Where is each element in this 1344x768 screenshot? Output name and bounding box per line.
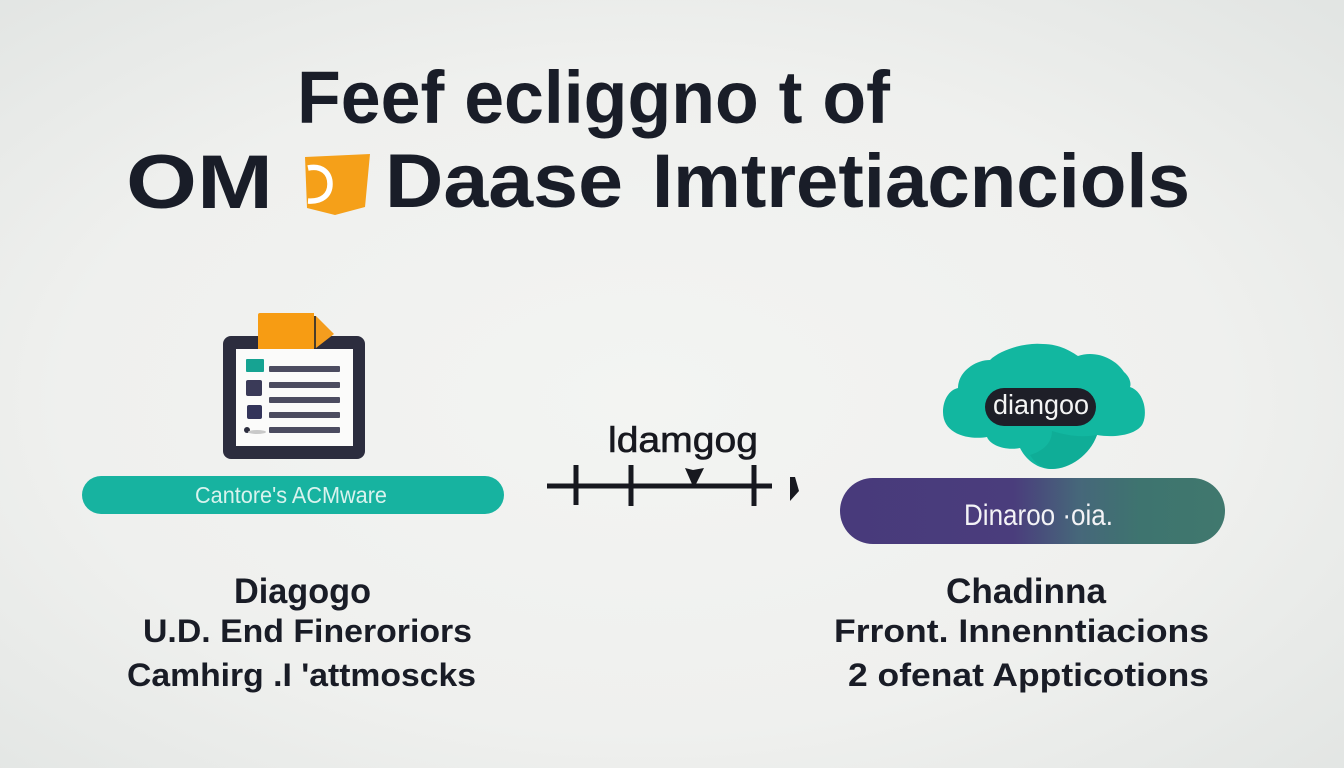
left text block: Diagogo [234, 572, 371, 611]
timeline label: ldamgog [608, 419, 758, 460]
title word: OM: OM [126, 140, 273, 225]
left text block [127, 572, 476, 693]
timeline arrow [547, 419, 799, 506]
icon: teal cloud with django badge [943, 344, 1145, 469]
teal bar: Cantore's ACMware [195, 482, 387, 508]
left text block: U.D. End Fineroriors [143, 613, 472, 649]
title [126, 56, 1190, 225]
right text block: Frront. Innenntiacions [834, 613, 1209, 649]
panel: left column [82, 313, 504, 693]
left text block: Camhirg .I 'attmoscks [127, 657, 476, 693]
right text block: Chadinna [946, 572, 1107, 611]
gradient purple bar [840, 478, 1225, 544]
teal bar [82, 476, 504, 514]
panel: right column [834, 344, 1225, 693]
title word: Daase: Daase [385, 139, 623, 224]
icon: teal cloud with django badge: diangoo [993, 389, 1089, 420]
icon: document with orange folder [223, 313, 365, 459]
title line 1: Feef ecliggno t of [297, 56, 890, 139]
icon: orange shield badge [305, 154, 370, 215]
right text block [834, 572, 1209, 693]
right text block: 2 ofenat Appticotions [848, 657, 1209, 693]
title word: Imtretiacnciols: Imtretiacnciols [652, 139, 1190, 224]
gradient purple bar: Dinaroo ·oia. [964, 499, 1113, 532]
